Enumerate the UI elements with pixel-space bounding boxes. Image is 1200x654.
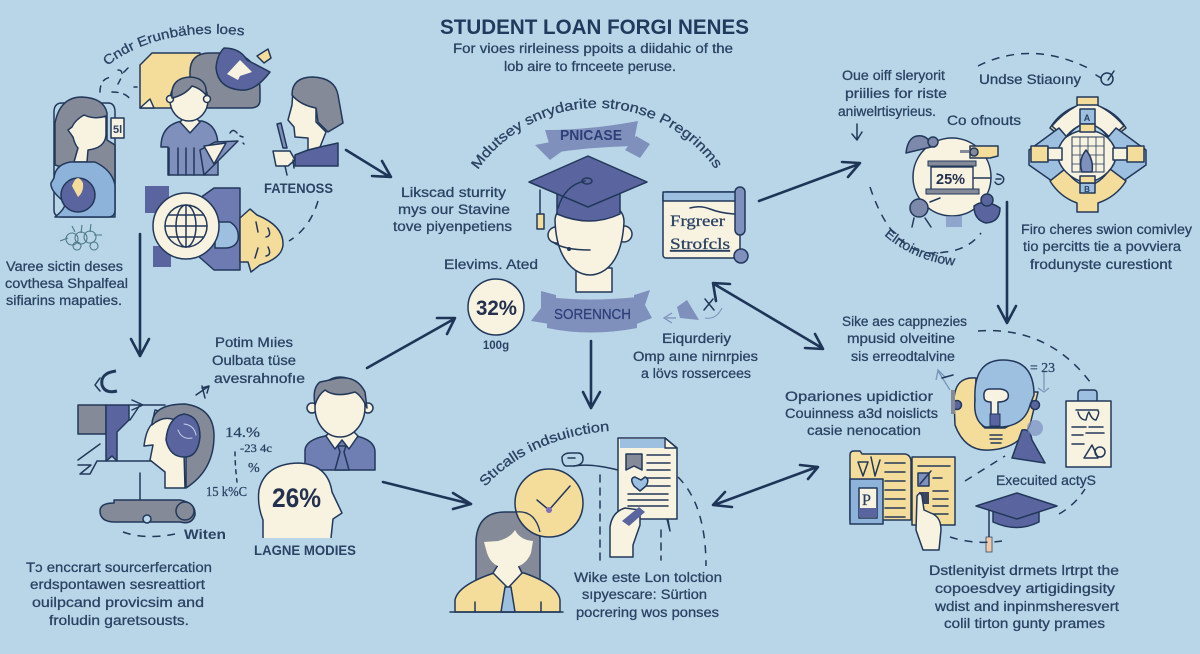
label: Execuited actyS	[996, 473, 1096, 488]
icon: face	[548, 202, 632, 292]
icon: clipboard	[1066, 390, 1111, 467]
arrow	[759, 162, 860, 201]
heading: Co ofnouts	[947, 113, 1021, 128]
text block	[842, 314, 967, 364]
text block: Omp aıne nirnrpies	[633, 349, 758, 364]
curved heading: Cndr Erunbähes loes	[104, 24, 244, 64]
panel: center graduate	[393, 98, 758, 381]
label: Witen	[184, 526, 226, 542]
title: STUDENT LOAN FORGI NENES	[440, 16, 749, 39]
arrow	[383, 482, 471, 509]
text block: Potim Mıies	[215, 335, 293, 350]
text block: casie nenocation	[807, 423, 921, 438]
icon: molecule	[60, 224, 102, 250]
icon: woman	[450, 512, 563, 612]
icon: scroll: Strofcls	[670, 236, 730, 253]
text block: sis erreodtalvine	[851, 349, 955, 364]
ribbon bottom: SORENNCH	[554, 307, 631, 323]
text block: avesrahnofıe	[214, 371, 305, 386]
text block: tio percitts tie a povviera	[1023, 239, 1182, 254]
icon: circle with 25%: 25%	[936, 172, 965, 188]
stat: 32%: Elevims. Ated	[444, 257, 538, 272]
stat: 32%: 100g	[483, 340, 509, 352]
handwritten numbers: %	[248, 461, 260, 476]
panel: lower-left	[26, 335, 375, 628]
panel: top-right	[838, 52, 1192, 272]
icon: target	[1096, 71, 1114, 85]
ribbon top: PNICASE	[560, 127, 622, 144]
text block: covthesa Shpalfeal	[5, 276, 128, 291]
arrow	[131, 234, 149, 356]
text block: Opariones upidictior	[785, 389, 934, 404]
text block: Dstlenityist drmets lrtrpt the	[929, 563, 1119, 578]
text block: Oulbata tüse	[212, 353, 296, 368]
icon: document with hand	[610, 438, 677, 557]
curved heading: Mdutsey snrydarite stronse Pregrinms	[470, 98, 720, 170]
ribbon top	[535, 121, 650, 160]
icon: circle with 25%	[906, 136, 1004, 227]
arrow	[998, 202, 1016, 323]
icon: puzzle wheel: A	[1084, 113, 1091, 123]
icon: open book with hand	[850, 451, 955, 550]
icon: board with moon	[140, 48, 271, 108]
icon: woman left	[51, 97, 124, 217]
handwritten numbers: 14.%	[225, 425, 260, 441]
text block: Wike este Lon tolction	[574, 570, 722, 585]
text block: frodunyste curestiont	[1030, 257, 1172, 272]
panel: top-left people group	[5, 24, 344, 308]
text block	[1021, 222, 1192, 272]
text block	[838, 68, 947, 119]
arrow	[583, 341, 600, 408]
subtitle: For vioes rirleiness ppoits a diidahic of the	[453, 41, 733, 56]
ribbon bottom	[531, 290, 652, 332]
text block: mpusid olveitine	[847, 331, 955, 346]
icon: head with 26%	[258, 463, 342, 538]
text block	[393, 185, 512, 234]
label: FATENOSS	[264, 181, 333, 196]
text block: Likscad sturrity	[401, 185, 506, 200]
text block: aniwelrtisyrieus.	[838, 104, 936, 119]
text block	[5, 259, 128, 308]
icon: puzzle wheel	[1029, 97, 1146, 212]
icon: head machine	[78, 386, 214, 537]
icon: pointer mark	[664, 299, 722, 323]
double arrow	[713, 283, 823, 349]
stat: 32%: 32%	[476, 297, 517, 320]
text block: ouilpcand provicsim and	[32, 595, 204, 610]
icon: clock	[515, 469, 583, 537]
text block: sifiarins mapaties.	[6, 293, 122, 308]
subtitle	[453, 41, 733, 74]
icon: graduation cap	[529, 156, 647, 229]
icon: globe puzzle	[145, 186, 283, 272]
text block: Firo cheres swion comivley	[1021, 222, 1192, 237]
text block	[785, 389, 938, 438]
icon: pill tag	[562, 453, 618, 470]
text block: colil tirton gunty prames	[944, 616, 1105, 631]
icon: puzzle wheel: B	[1084, 185, 1090, 194]
icon: lightbulb head	[936, 360, 1055, 463]
subtitle: lob aire to frnceete peruse.	[504, 59, 676, 74]
icon: man with clipboard	[161, 77, 244, 175]
icon: lightbulb head: = 23	[1030, 361, 1055, 376]
icon: man in suit	[305, 377, 375, 470]
text block: Sike aes cappnezies	[842, 314, 967, 329]
handwritten numbers: 15 k%C	[206, 485, 247, 500]
text block	[26, 560, 212, 628]
text block	[212, 335, 305, 386]
text block: priilies for riste	[845, 86, 947, 101]
icon: C mark	[95, 371, 117, 392]
text block: froludin garetsousts.	[49, 613, 189, 628]
text block	[574, 570, 722, 620]
label: LAGNE MODIES	[254, 543, 356, 558]
icon: graduation cap	[976, 493, 1057, 552]
arrow	[367, 318, 455, 368]
icon: head with 26%: 26%	[272, 483, 321, 513]
curved label: Elrtoinrefiow	[884, 228, 956, 266]
arrow	[346, 150, 391, 177]
text block: sıpyescare: Sürtion	[582, 587, 707, 602]
text block: wdist and inpinmsheresvert	[934, 599, 1119, 614]
text block: a lövs rossercees	[641, 366, 751, 381]
icon: scroll: Frgreer	[670, 213, 726, 230]
panel: bottom center	[449, 423, 722, 620]
text block: tove piyenpetiens	[393, 219, 512, 234]
text block: Varee sictin deses	[6, 259, 123, 274]
icon: open book with hand: P	[862, 492, 871, 509]
heading: Undse Stiaoıny	[979, 72, 1081, 87]
panel: lower-right	[785, 314, 1119, 631]
handwritten numbers: -23 4c	[240, 441, 272, 455]
text block: Oue oiff sleryorit	[842, 68, 945, 83]
text block: erdspontawen sesreattiort	[30, 577, 205, 592]
text block: Tɔ enccrart sourcerfercation	[26, 560, 212, 575]
text block: Couinness a3d noislicts	[785, 406, 938, 421]
dashes	[100, 68, 137, 99]
curved heading: Stıcalls indsuiıction	[480, 423, 609, 486]
text block: copoesdvey artigidingsity	[935, 581, 1115, 596]
icon: scroll	[663, 187, 748, 263]
text block: mys our Stavine	[398, 202, 510, 217]
text block	[633, 331, 758, 381]
double arrow	[713, 465, 818, 507]
text block: pocrering wos ponses	[576, 605, 719, 620]
icon: woman left: 5l	[113, 124, 122, 136]
icon: woman with pen	[273, 77, 343, 175]
text block: Eiqurderiy	[662, 331, 731, 346]
text block	[929, 563, 1119, 631]
handwritten numbers	[206, 425, 272, 500]
stat: 32%	[444, 257, 538, 352]
